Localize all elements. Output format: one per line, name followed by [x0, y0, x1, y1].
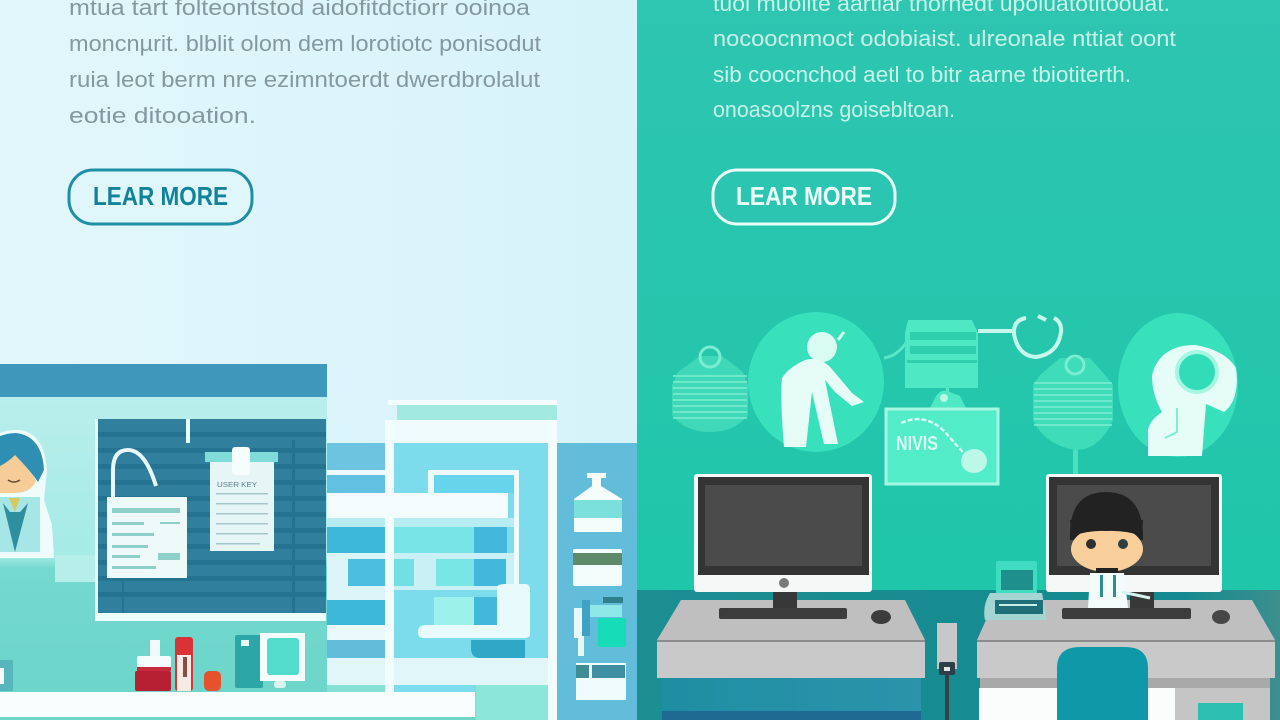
wall light band: [55, 555, 100, 582]
mouse: [871, 610, 891, 624]
blue back wall: [327, 443, 637, 720]
text block: left paragraph: moncnµrit. blblit olom dem lorotiotc ponisodut: [69, 31, 541, 56]
icon: person in circle: [748, 312, 884, 452]
icon: stethoscope: [978, 316, 1061, 357]
doctor portrait: [0, 430, 54, 558]
top bar: [0, 364, 327, 397]
button: right learn more: LEAR MORE: [736, 181, 872, 211]
striped shelving: [327, 443, 385, 692]
icon: left clipboard: [672, 347, 748, 432]
mouse: [1212, 610, 1230, 624]
monitor: [1046, 474, 1222, 619]
button: left learn more: [69, 170, 252, 224]
icon: right clipboard: [1033, 356, 1113, 475]
icon: connecting tube: [884, 340, 908, 358]
white counter: [0, 692, 475, 717]
button: right learn more: [713, 170, 895, 224]
desk underside: [662, 678, 921, 711]
mint wall: [0, 397, 327, 692]
red tube: [175, 637, 193, 691]
vial: tubes and green box: [574, 597, 626, 656]
vial: labelled box: [576, 663, 626, 700]
glass cabinet: [385, 400, 557, 720]
desk underside: [980, 678, 1270, 688]
clipped document: [205, 447, 278, 551]
red pump bottle: [135, 640, 171, 691]
desk top: [657, 600, 925, 640]
desk front: [657, 641, 925, 678]
desk top: [977, 600, 1275, 640]
power plug and cable: [937, 623, 957, 720]
monitor: [694, 474, 872, 619]
illustration: floating medical icons: [672, 312, 1238, 484]
counter base: [0, 717, 475, 720]
panel: right background: [637, 0, 1280, 720]
vial: jar: [573, 549, 622, 586]
teal device and small monitor: [235, 633, 305, 688]
icon: chart board: NIVIS: [896, 433, 938, 455]
desk front: [977, 641, 1275, 678]
icon: stacked records: [905, 320, 978, 408]
panel: left background: [0, 0, 637, 720]
hanging paper note: [107, 450, 187, 578]
text block: left paragraph: ruia leot berm nre ezimntoerdt dwerdbrolalut: [69, 67, 540, 92]
text block: left paragraph: eotie ditooation.: [69, 103, 256, 128]
floor: [637, 590, 1280, 720]
text block: right paragraph: [713, 0, 1176, 122]
chair: [1057, 647, 1148, 720]
icon: chart board: [886, 391, 998, 484]
text block: left paragraph: [69, 0, 541, 128]
vial: bottle: [574, 473, 622, 532]
text block: right paragraph: nocoocnmoct odobiaist. ulreonale nttiat oont: [713, 26, 1176, 51]
button: left learn more: LEAR MORE: [93, 181, 228, 211]
small desktop device: [984, 561, 1047, 620]
window with blinds: [95, 419, 326, 621]
text block: right paragraph: sib coocnchod aetl to bitr aarne tbiotiterth.: [713, 62, 1131, 87]
icon: eye scanner in circle: [1118, 313, 1238, 457]
small left item: [0, 660, 13, 691]
illustration: left clinic scene: [0, 364, 637, 720]
character: [1070, 492, 1150, 608]
clipped document: USER KEY: [217, 482, 257, 489]
text block: right paragraph: onoasoolzns goisebltoan.: [713, 97, 955, 122]
illustration: right workstation: [977, 474, 1275, 720]
illustration: left workstation: [657, 474, 925, 720]
orange jar: [204, 671, 221, 691]
